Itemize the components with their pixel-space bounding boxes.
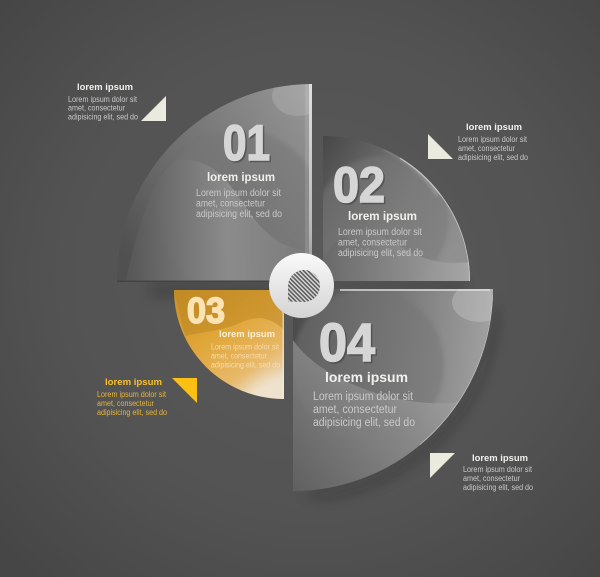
icon: triangle 01	[141, 96, 166, 121]
callout 02: lorem ipsum	[466, 122, 522, 133]
heading 01: lorem ipsum	[207, 172, 275, 184]
panel: segment 04	[293, 289, 493, 491]
heading 04: lorem ipsum	[325, 370, 408, 385]
body text 04: amet, consectetur	[313, 404, 397, 416]
body text 02: amet, consectetur	[338, 238, 408, 248]
icon: center disc with hatched drop	[269, 253, 334, 318]
body text 03: adipisicing elit, sed do	[211, 360, 280, 370]
panel: segment 02: 02	[333, 157, 385, 213]
segment 04 glass	[293, 289, 493, 491]
icon: triangle 02	[428, 134, 453, 159]
panel: segment 04: 04	[319, 313, 375, 373]
body text 03	[211, 342, 280, 370]
body text 01	[196, 188, 282, 220]
body text 04: adipisicing elit, sed do	[313, 417, 415, 429]
number 04: 04	[320, 314, 376, 374]
callout 03: amet, consectetur	[97, 399, 154, 408]
panel: segment 01: 01	[223, 115, 270, 171]
body text 04: Lorem ipsum dolor sit	[313, 391, 414, 403]
callout 01: amet, consectetur	[68, 104, 125, 112]
callout 03: Lorem ipsum dolor sit	[97, 390, 167, 399]
segment 03 glass	[174, 290, 284, 399]
callout 04: amet, consectetur	[463, 474, 520, 483]
body text 02	[338, 227, 423, 259]
icon: triangle 04	[430, 453, 455, 478]
wedge shadows	[150, 283, 500, 500]
callout 02	[428, 122, 528, 162]
callout 04: Lorem ipsum dolor sit	[463, 465, 533, 474]
callout 01	[68, 82, 166, 122]
panel: segment 03	[174, 290, 284, 399]
panel: segment 02	[316, 136, 470, 288]
callout 04: lorem ipsum	[472, 453, 528, 464]
body text 01: amet, consectetur	[196, 198, 266, 210]
callout 02: adipisicing elit, sed do	[458, 153, 528, 162]
icon: triangle 03	[172, 378, 197, 403]
callout 02: amet, consectetur	[458, 144, 515, 153]
callout 01: Lorem ipsum dolor sit	[68, 95, 138, 104]
number 01: 01	[224, 116, 272, 172]
callout 03	[97, 377, 197, 417]
heading 02: lorem ipsum	[348, 211, 417, 223]
segment 02 glass	[316, 136, 470, 288]
body text 01: adipisicing elit, sed do	[196, 209, 282, 220]
body text 03: amet, consectetur	[211, 352, 267, 360]
body text 02: Lorem ipsum dolor sit	[338, 227, 422, 238]
number 03: 03	[187, 290, 225, 331]
callout 04: adipisicing elit, sed do	[463, 483, 533, 492]
segment 01 glass	[117, 84, 312, 282]
callout 02: Lorem ipsum dolor sit	[458, 135, 528, 144]
body text 02: adipisicing elit, sed do	[338, 248, 423, 259]
body text 01: Lorem ipsum dolor sit	[196, 188, 281, 199]
number 02: 02	[334, 158, 386, 214]
panel: segment 01	[117, 84, 312, 282]
callout 03: lorem ipsum	[105, 377, 162, 388]
callout 01: lorem ipsum	[77, 82, 133, 93]
callout 03: adipisicing elit, sed do	[97, 408, 167, 417]
callout 01: adipisicing elit, sed do	[68, 112, 138, 122]
body text 04	[313, 391, 415, 429]
body text 03: Lorem ipsum dolor sit	[211, 342, 280, 352]
callout 04	[430, 453, 533, 492]
heading 03: lorem ipsum	[219, 329, 275, 340]
